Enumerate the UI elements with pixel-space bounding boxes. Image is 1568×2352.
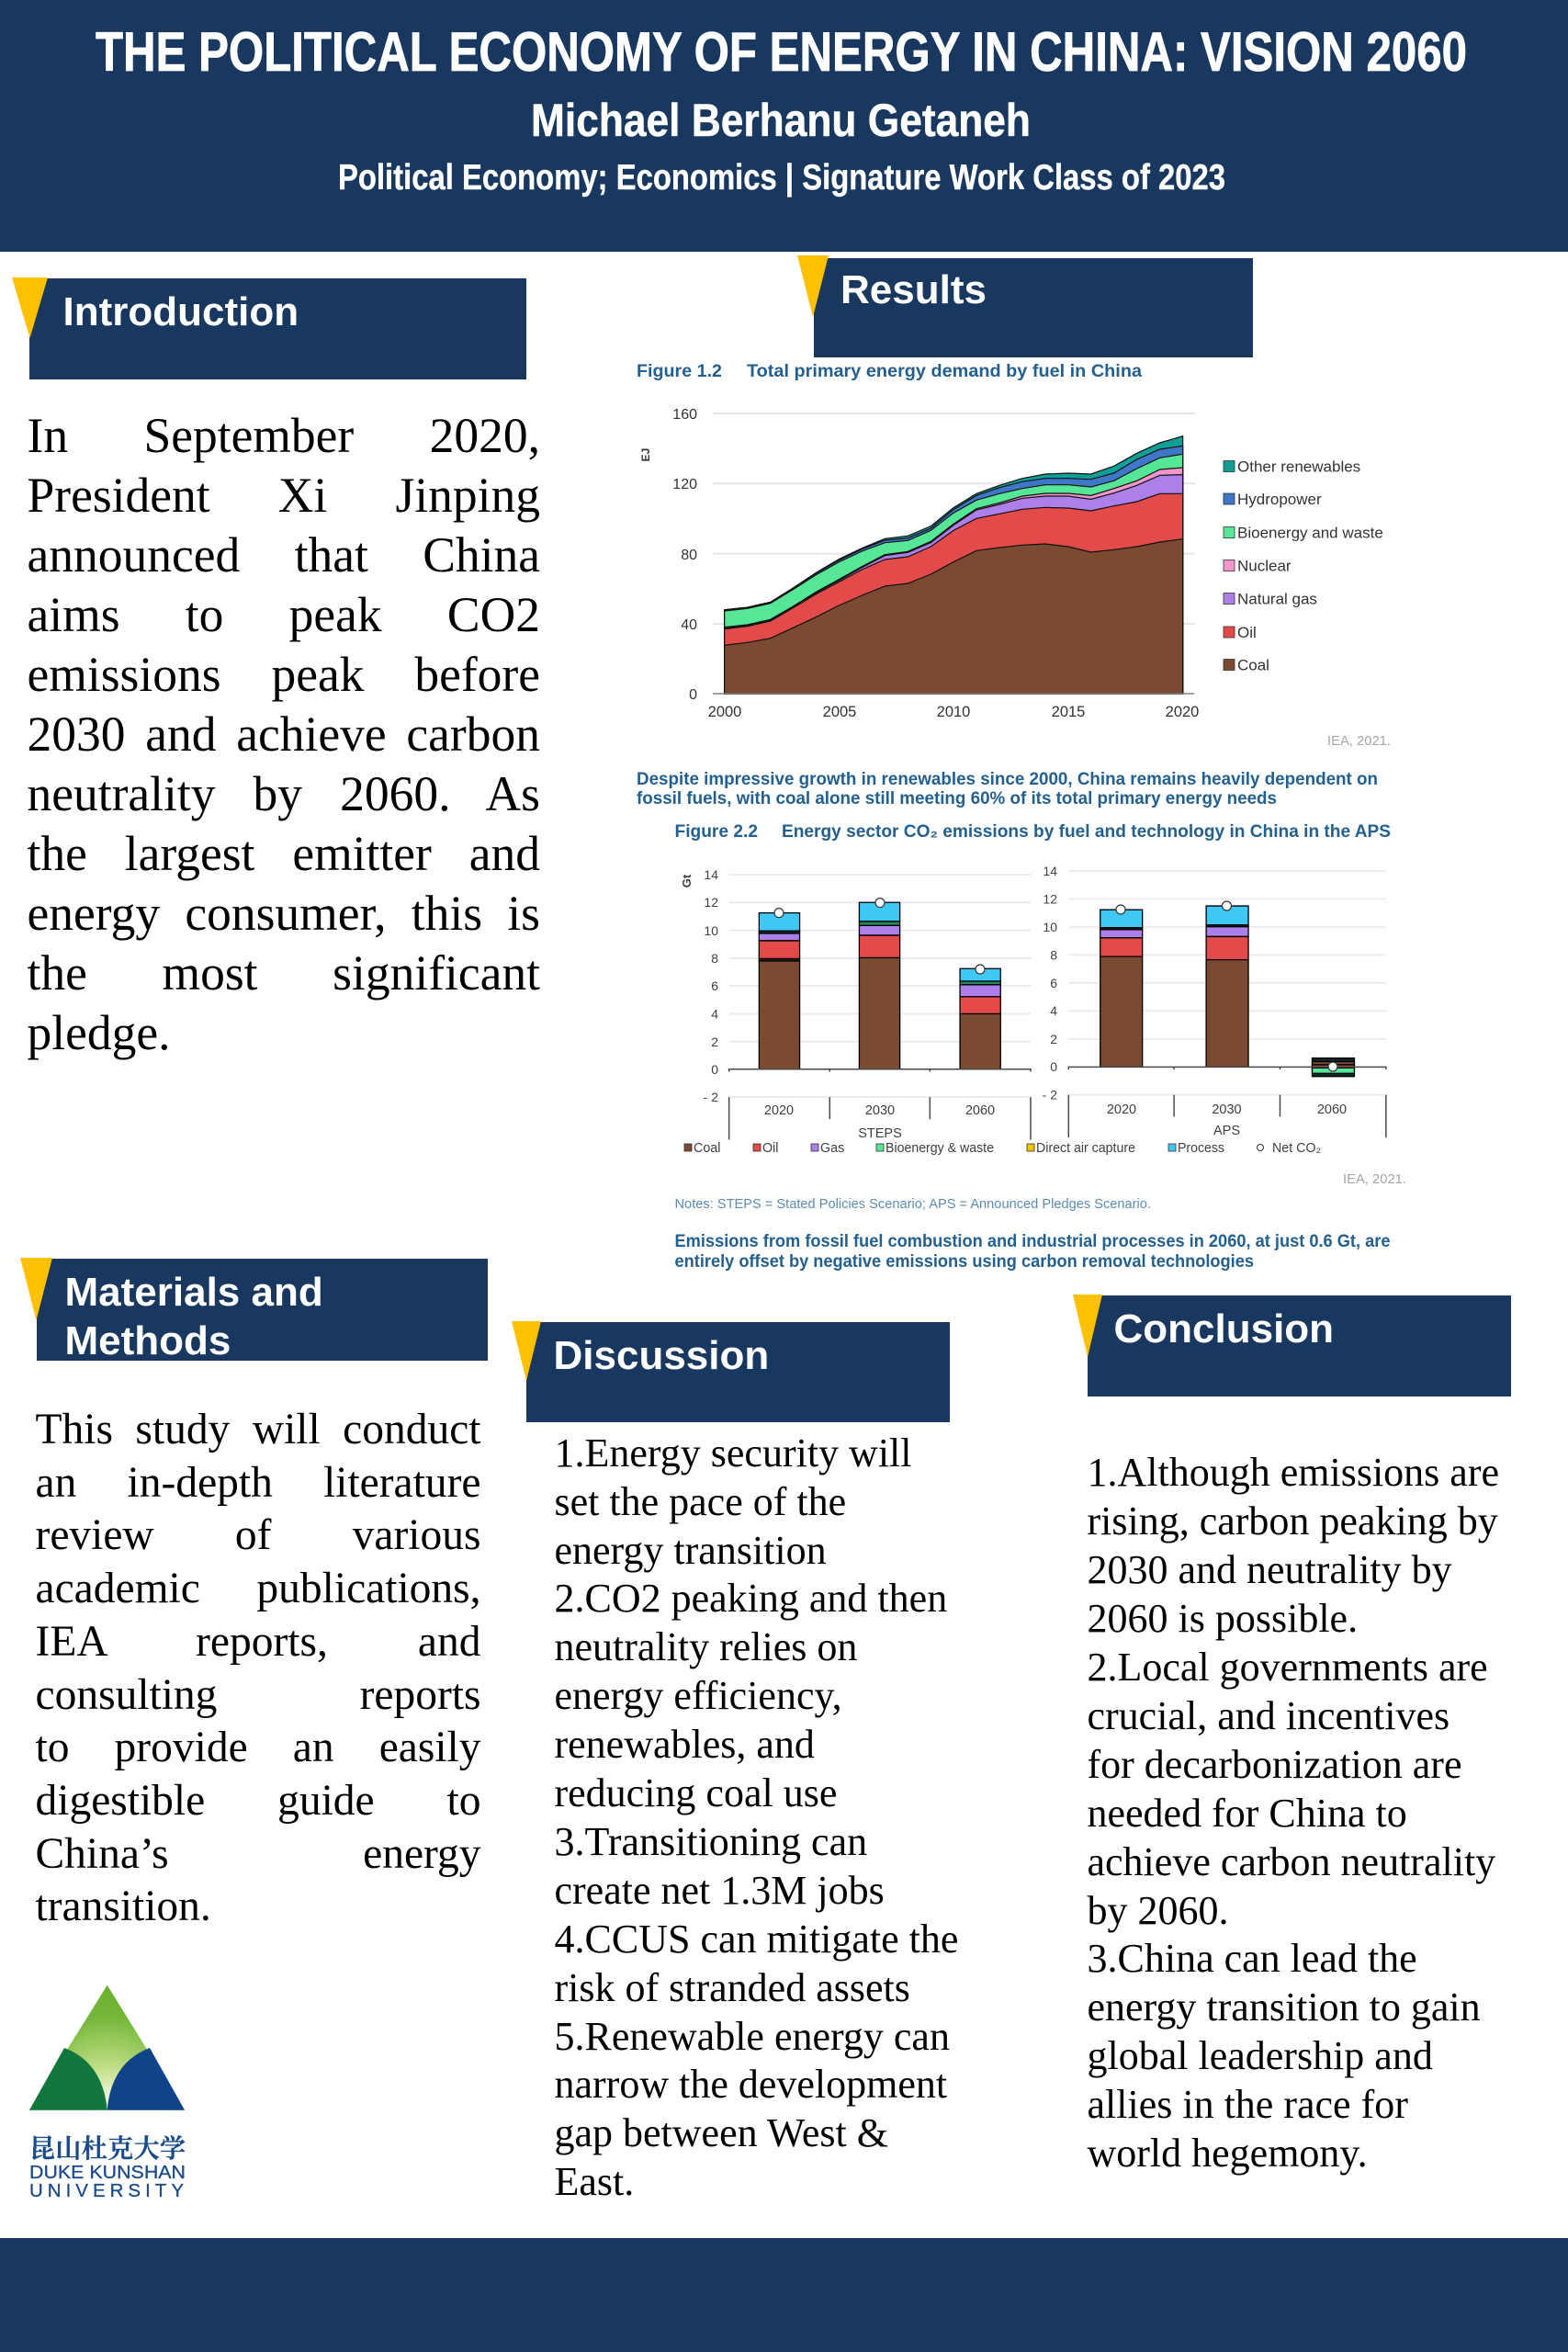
x axis labels: 2020 (764, 1103, 794, 1118)
panel: results (637, 255, 1406, 1272)
y axis labels: 80 (681, 548, 697, 563)
legend: Gas (820, 1141, 844, 1156)
heading: materials and methods: Materials and (64, 1270, 323, 1315)
text block: discussion body: risk of stranded assets (555, 1965, 910, 2010)
logo wordmark: UNIVERSITY (29, 2180, 184, 2201)
legend: Hydropower (1237, 491, 1322, 508)
y axis unit: EJ (639, 448, 652, 461)
text block: materials and methods body: China’s energy (35, 1830, 481, 1878)
text block: introduction body: 2030 and achieve carbon (28, 707, 540, 762)
legend: Natural gas (1237, 590, 1317, 608)
chart: energy sector CO2 emissions (674, 822, 1406, 1272)
text block: conclusion body: allies in the race for (1088, 2082, 1408, 2127)
logo: Duke Kunshan University (29, 1984, 186, 2201)
y axis labels: right: 8 (1050, 948, 1057, 963)
author: Michael Berhanu Getaneh (531, 95, 1031, 146)
text block: introduction body: the largest emitter and (28, 826, 540, 881)
text block: discussion body: 2.CO2 peaking and then (555, 1576, 947, 1621)
x axis labels: 2005 (823, 704, 856, 720)
text block: introduction body: aims to peak CO2 (28, 587, 540, 642)
y axis labels: left: - 2 (704, 1090, 718, 1104)
text block: conclusion body: by 2060. (1088, 1888, 1229, 1933)
y axis labels: right: 10 (1043, 920, 1057, 934)
text block: discussion body (555, 1430, 958, 2204)
net CO2 markers (774, 899, 1337, 1071)
text block: materials and methods body: to provide an easily (35, 1724, 481, 1771)
text block: conclusion body: 2.Local governments are (1088, 1645, 1488, 1690)
logo wordmark (29, 2129, 186, 2201)
heading: introduction (12, 277, 526, 379)
y axis labels: left (704, 867, 718, 1104)
legend (684, 1141, 1321, 1156)
y axis labels: right: 4 (1050, 1003, 1057, 1018)
x axis labels: 2060 (1317, 1102, 1347, 1117)
figure 2.2 title: Energy sector CO₂ emissions by fuel and technology in China in the APS (782, 822, 1391, 842)
legend: Coal (694, 1141, 720, 1156)
text block: materials and methods body (35, 1406, 481, 1930)
x axis labels (764, 1102, 1347, 1141)
chart: total primary energy demand (637, 362, 1391, 808)
text block: discussion body: set the pace of the (555, 1479, 846, 1524)
text block: conclusion body: 2030 and neutrality by (1088, 1547, 1452, 1592)
logo mark (29, 1985, 185, 2110)
y axis labels: left: 10 (704, 923, 718, 938)
text block: conclusion body: energy transition to gain (1088, 1984, 1481, 2030)
y axis labels: left: 14 (704, 867, 718, 882)
text block: discussion body: renewables, and (555, 1722, 815, 1767)
text block: materials and methods body: consulting reports (35, 1671, 481, 1719)
heading: materials and methods (20, 1258, 488, 1363)
text block: introduction body (28, 408, 540, 1060)
text block: conclusion body: 2060 is possible. (1088, 1596, 1358, 1641)
figure 2.2 title: Figure 2.2 (674, 822, 758, 842)
y axis labels (672, 407, 697, 703)
text block: conclusion body: crucial, and incentives (1088, 1693, 1450, 1738)
legend: Oil (762, 1141, 778, 1156)
x axis labels: 2030 (1212, 1102, 1242, 1117)
text block: conclusion body: achieve carbon neutrality (1088, 1839, 1495, 1884)
x axis labels: 2015 (1052, 704, 1085, 720)
text block: conclusion body (1088, 1450, 1499, 2176)
text block: introduction body: neutrality by 2060. As (28, 766, 540, 821)
text block: materials and methods body: This study will conduct (35, 1406, 481, 1453)
caption: figure 2.2 (674, 1232, 1391, 1272)
legend: Process (1178, 1141, 1224, 1156)
text block: discussion body: 5.Renewable energy can (555, 2014, 950, 2059)
source note: IEA, 2021. (1343, 1171, 1406, 1187)
x axis labels: 2060 (965, 1103, 995, 1118)
figure 1.2 title: Figure 1.2 (637, 362, 722, 381)
y axis labels: 120 (672, 477, 697, 492)
text block: introduction body: announced that China (28, 527, 540, 582)
y axis labels: left: 12 (704, 895, 718, 910)
y axis labels: 0 (689, 687, 697, 703)
y axis labels: right (1043, 864, 1057, 1102)
legend: Bioenergy and waste (1237, 524, 1383, 542)
text block: discussion body: energy transition (555, 1527, 827, 1573)
legend: Other renewables (1237, 458, 1360, 476)
stacked area plot (713, 413, 1195, 694)
x axis labels: 2020 (1166, 704, 1199, 720)
caption: figure 1.2 (637, 770, 1378, 808)
text block: introduction body: President Xi Jinping (28, 468, 540, 523)
text block: conclusion body: needed for China to (1088, 1791, 1407, 1836)
panel: discussion (512, 1321, 958, 2204)
y axis labels: right: 14 (1043, 864, 1057, 878)
stacked bars (729, 871, 1386, 1140)
y axis labels: right: 2 (1050, 1032, 1057, 1046)
y axis labels: 40 (681, 617, 697, 633)
header band (0, 0, 1568, 252)
x axis labels: STEPS (858, 1126, 902, 1141)
y axis labels: left: 6 (711, 978, 718, 993)
y axis unit: Gt (680, 874, 694, 888)
text block: discussion body: create net 1.3M jobs (555, 1868, 885, 1913)
text block: materials and methods body: academic publications, (35, 1565, 481, 1612)
panel: introduction (12, 277, 540, 1060)
subtitle: Political Economy; Economics | Signature Work Class of 2023 (338, 158, 1225, 198)
text block: introduction body: emissions peak before (28, 647, 540, 702)
text block: introduction body: pledge. (28, 1005, 170, 1060)
text block: discussion body: narrow the development (555, 2062, 947, 2107)
text block: discussion body: 1.Energy security will (555, 1430, 911, 1476)
notes: Notes: STEPS = Stated Policies Scenario; APS = Announced Pledges Scenario. (674, 1196, 1151, 1212)
footer band (0, 2238, 1568, 2352)
text block: conclusion body: 1.Although emissions are (1088, 1450, 1499, 1495)
caption: figure 1.2: fossil fuels, with coal alone still meeting 60% of its total primary energy needs (637, 789, 1277, 808)
text block: discussion body: 3.Transitioning can (555, 1819, 867, 1864)
text block: materials and methods body: IEA reports, and (35, 1618, 481, 1666)
text block: materials and methods body: review of various (35, 1511, 481, 1559)
text block: conclusion body: global leadership and (1088, 2033, 1433, 2078)
y axis labels: right: 12 (1043, 891, 1057, 906)
y axis labels: left: 8 (711, 951, 718, 966)
logo wordmark: 昆山杜克大学 (29, 2129, 186, 2165)
y axis labels: 160 (672, 407, 697, 423)
x axis labels: 2030 (865, 1103, 895, 1118)
y axis labels: right: - 2 (1043, 1088, 1057, 1102)
text block: conclusion body: 3.China can lead the (1088, 1936, 1417, 1981)
x axis labels: APS (1213, 1124, 1240, 1138)
text block: introduction body: In September 2020, (28, 408, 540, 463)
legend: Direct air capture (1036, 1141, 1135, 1156)
logo wordmark: DUKE KUNSHAN (29, 2162, 186, 2183)
text block: discussion body: neutrality relies on (555, 1624, 857, 1669)
heading: results (797, 255, 1253, 357)
y axis labels: left: 0 (711, 1062, 718, 1077)
text block: discussion body: East. (555, 2159, 634, 2204)
panel: materials and methods (20, 1258, 488, 1930)
text block: discussion body: gap between West & (555, 2110, 888, 2155)
x axis labels: 2010 (937, 704, 970, 720)
heading: conclusion (1073, 1295, 1511, 1396)
text block: conclusion body: world hegemony. (1088, 2131, 1368, 2176)
heading: conclusion: Conclusion (1113, 1306, 1334, 1351)
figure 1.2 title: Total primary energy demand by fuel in China (747, 362, 1142, 381)
text block: discussion body: reducing coal use (555, 1770, 837, 1815)
text block: introduction body: the most significant (28, 945, 540, 1001)
caption: figure 2.2: entirely offset by negative emissions using carbon removal technologies (674, 1252, 1254, 1272)
text block: materials and methods body: transition. (35, 1883, 211, 1930)
caption: figure 2.2: Emissions from fossil fuel combustion and industrial processes in 2060, at just 0.6 Gt, are (674, 1232, 1391, 1251)
legend: Bioenergy & waste (886, 1141, 994, 1156)
legend: Coal (1237, 656, 1269, 674)
heading: introduction: Introduction (62, 289, 299, 334)
panel: conclusion (1073, 1295, 1511, 2176)
text block: discussion body: energy efficiency, (555, 1673, 842, 1718)
caption: figure 1.2: Despite impressive growth in renewables since 2000, China remains heavily dependent on (637, 770, 1378, 789)
heading: discussion: Discussion (553, 1333, 769, 1378)
x axis labels (708, 704, 1199, 720)
y axis labels: right: 6 (1050, 976, 1057, 990)
heading: materials and methods: Methods (64, 1318, 231, 1363)
text block: discussion body: 4.CCUS can mitigate the (555, 1917, 958, 1962)
legend (1224, 458, 1383, 674)
source note: IEA, 2021. (1327, 733, 1391, 749)
legend: Oil (1237, 624, 1257, 641)
legend: Nuclear (1237, 557, 1292, 575)
text block: materials and methods body: an in-depth literature (35, 1459, 481, 1507)
y axis labels: right: 0 (1050, 1059, 1057, 1074)
text block: introduction body: energy consumer, this is (28, 886, 540, 941)
legend: Net CO₂ (1272, 1141, 1321, 1156)
x axis labels: 2020 (1107, 1102, 1136, 1117)
text block: conclusion body: for decarbonization are (1088, 1742, 1462, 1787)
x axis labels: 2000 (708, 704, 741, 720)
text block: materials and methods body: digestible guide to (35, 1777, 481, 1825)
text block: conclusion body: rising, carbon peaking by (1088, 1498, 1498, 1544)
heading: results: Results (840, 267, 987, 312)
y axis labels: left: 4 (711, 1007, 718, 1022)
y axis labels: left: 2 (711, 1035, 718, 1049)
heading: discussion (512, 1321, 950, 1422)
